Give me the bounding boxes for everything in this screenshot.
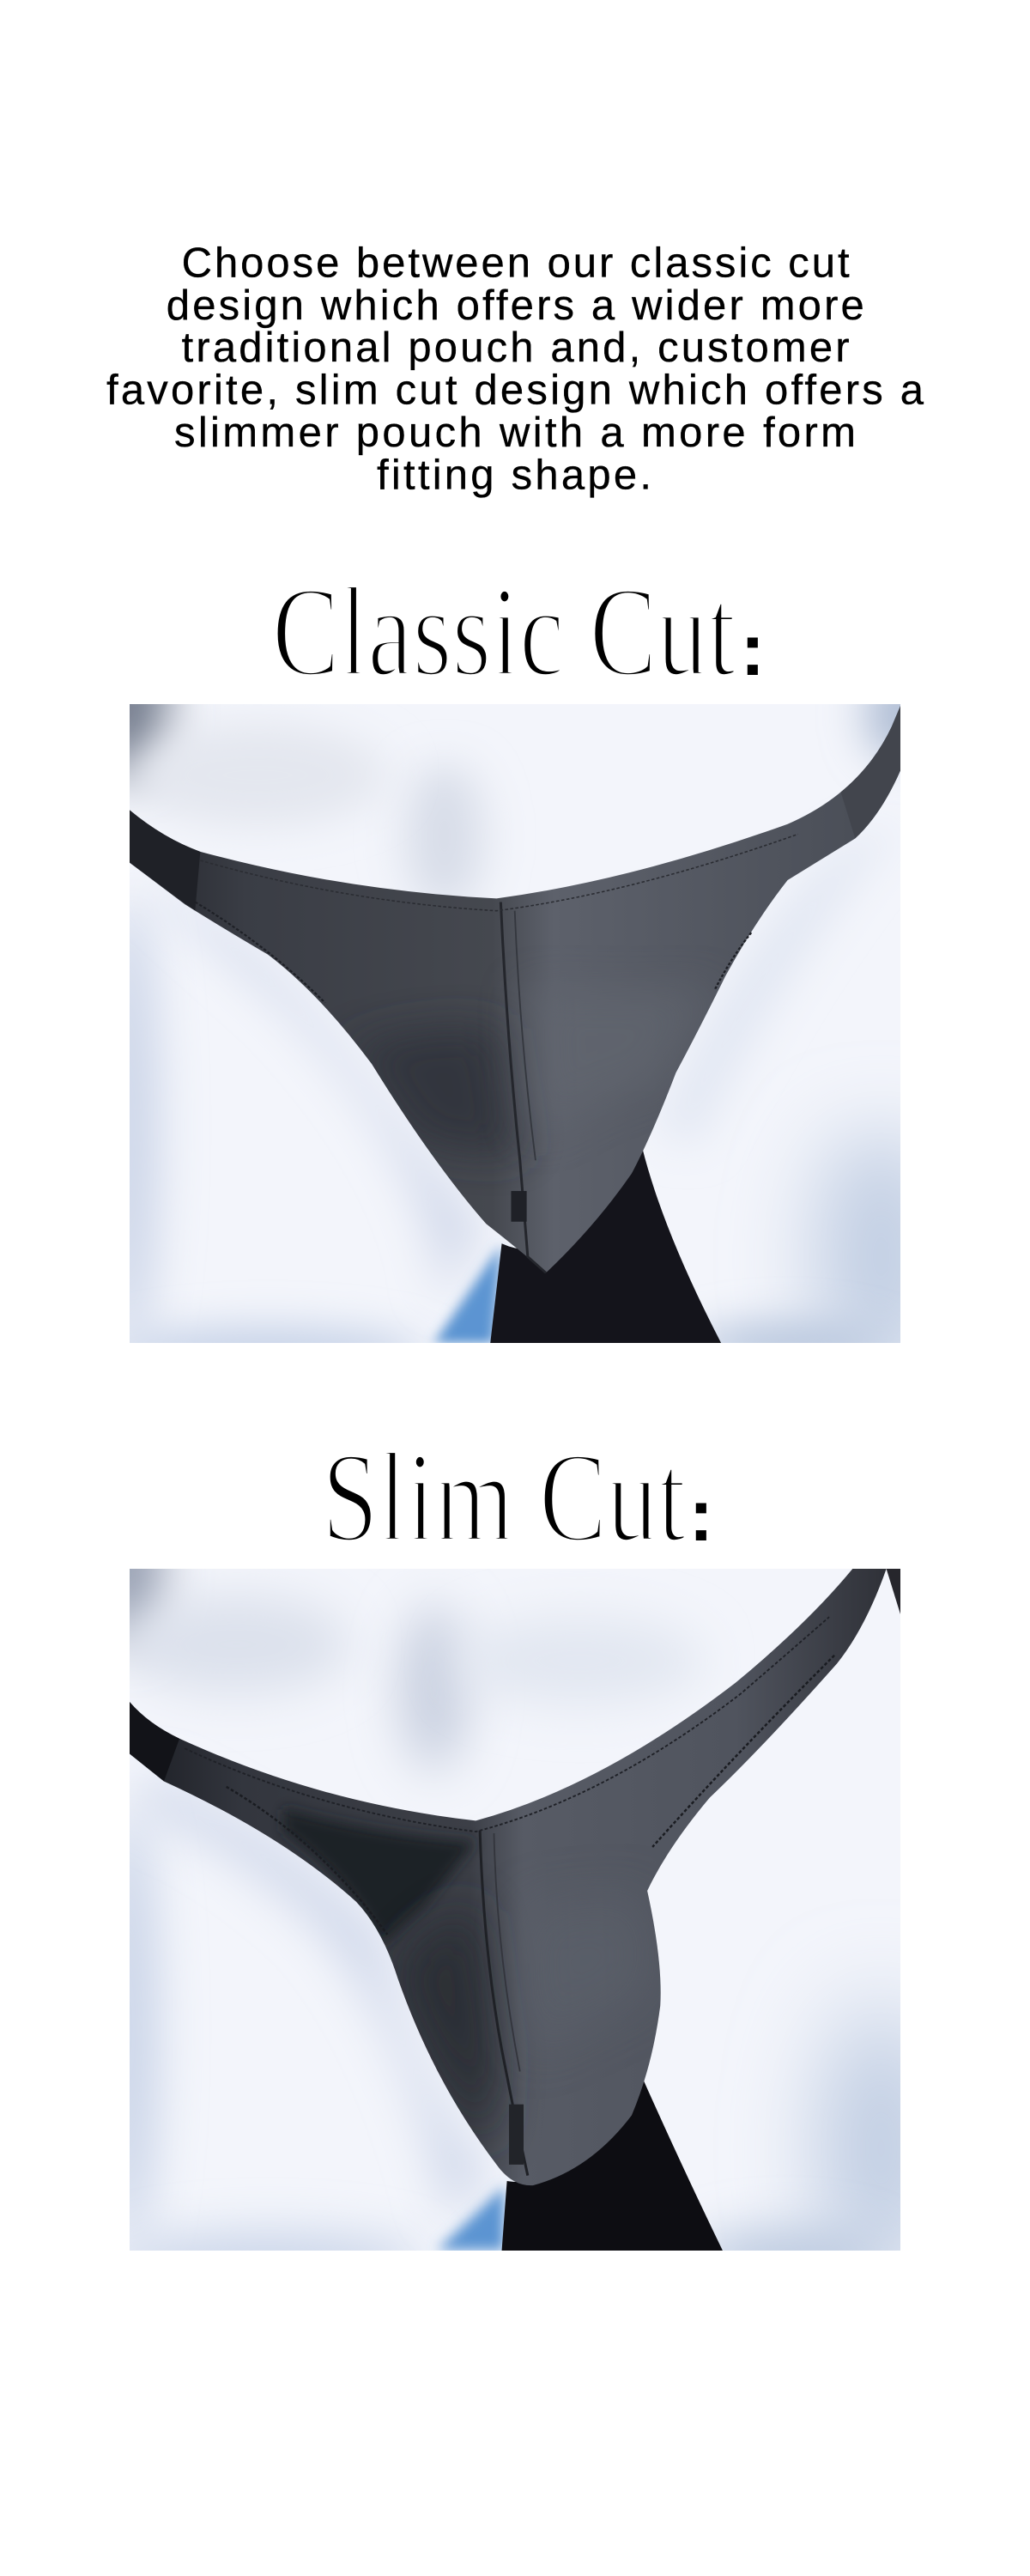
- intro text block: favorite, slim cut design which offers a: [106, 368, 924, 414]
- garment shading: [130, 706, 900, 1156]
- top stitching: [185, 1617, 829, 1832]
- intro text block: design which offers a wider more: [167, 283, 864, 329]
- garment shading: [130, 1702, 652, 2148]
- mannequin body: [99, 1502, 938, 2291]
- photo: slim cut garment on mannequin: [130, 1569, 900, 2251]
- garment: classic cut: [130, 706, 900, 1273]
- blue background sliver: [437, 2186, 505, 2251]
- dark gap between legs: [502, 2077, 723, 2251]
- intro text block: Choose between our classic cut: [182, 240, 850, 287]
- mannequin body: [94, 635, 938, 1388]
- photo: classic cut garment on mannequin: [130, 704, 900, 1343]
- lower stitching: [195, 902, 751, 1003]
- intro text block: [106, 240, 924, 499]
- dark gap between legs: [490, 1147, 721, 1343]
- top stitching: [200, 834, 798, 911]
- lower stitching: [227, 1656, 834, 1935]
- blue background sliver: [434, 1243, 502, 1343]
- centre seam: [500, 902, 546, 1273]
- intro text block: traditional pouch and, customer: [182, 325, 850, 371]
- dark corner at top right: [887, 1569, 900, 1614]
- seam tab: [511, 1191, 527, 1222]
- intro text block: fitting shape.: [377, 453, 651, 499]
- intro text block: slimmer pouch with a more form: [174, 410, 856, 456]
- garment: slim cut: [130, 1569, 887, 2185]
- centre seam: [480, 1831, 528, 2176]
- seam tab: [509, 2105, 524, 2165]
